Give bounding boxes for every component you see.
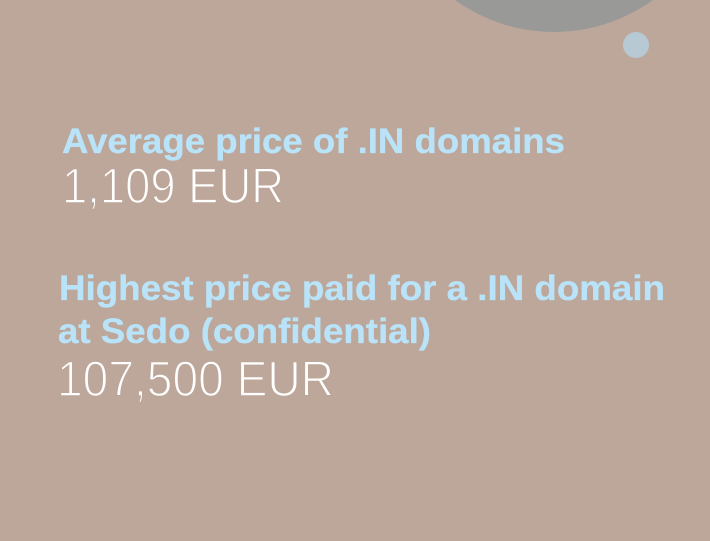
icon: small blue circle <box>623 32 649 58</box>
heading: highest price <box>58 269 665 351</box>
figure: highest price value: 107,500 EUR <box>57 351 334 407</box>
heading: highest price: Highest price paid for a .IN domain <box>59 269 665 308</box>
icon: large grey circle <box>385 0 710 32</box>
figure: average price value: 1,109 EUR <box>62 158 284 214</box>
heading: average price: Average price of .IN domains <box>62 122 565 161</box>
heading: highest price: at Sedo (confidential) <box>58 312 431 351</box>
